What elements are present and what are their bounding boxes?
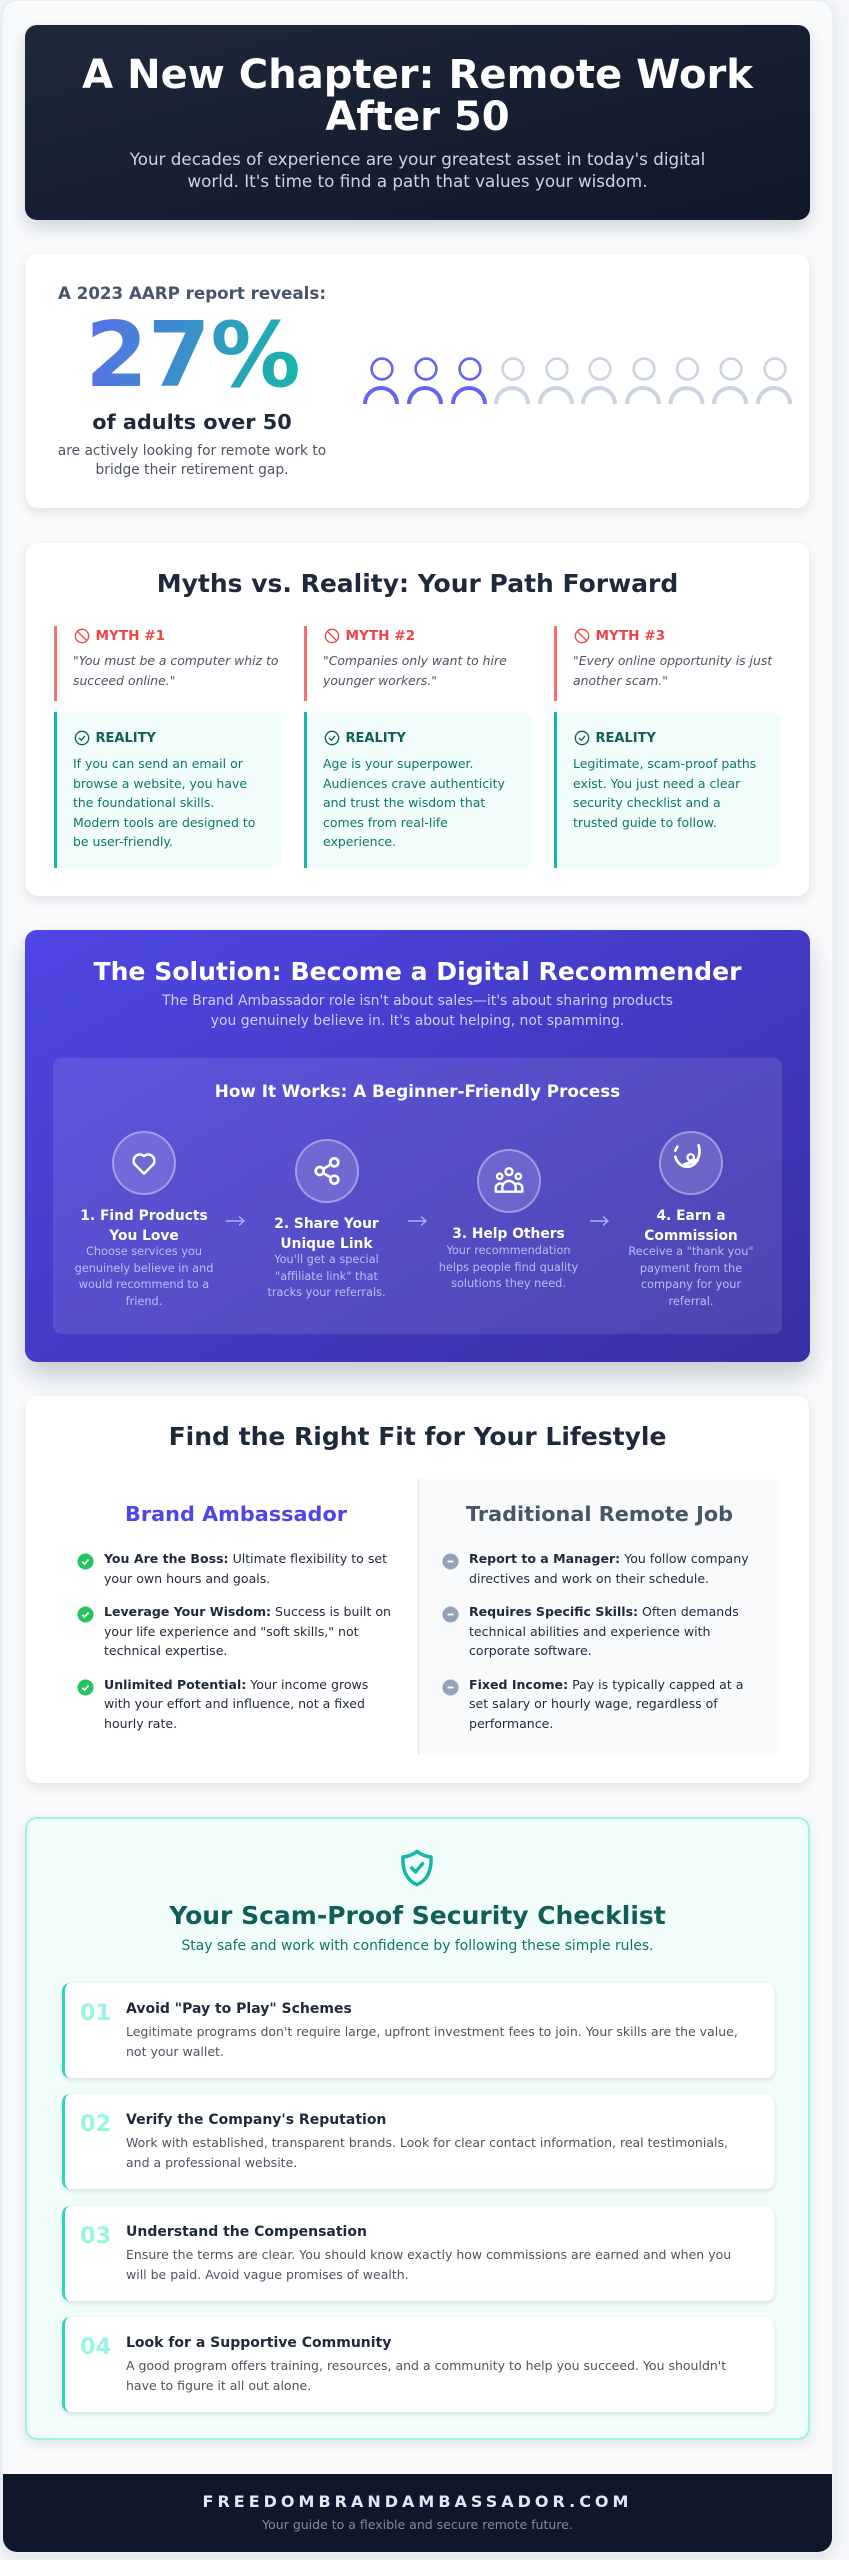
- stat number: 27%: [85, 302, 301, 408]
- item text: [126, 2245, 731, 2284]
- icon: check: [78, 1554, 94, 1570]
- item text: Work with established, transparent brands. Look for clear contact information, real testimonials,: [126, 2135, 728, 2150]
- arrow 1: [226, 1216, 245, 1226]
- step text: friend.: [126, 1295, 162, 1308]
- solution description: [162, 993, 673, 1029]
- myth 1: [54, 626, 282, 701]
- footer: [3, 2474, 832, 2552]
- reality text: browse a website, you have: [73, 776, 247, 790]
- reality 2: [304, 712, 532, 868]
- item text: have to figure it all out alone.: [126, 2378, 311, 2392]
- stat intro: A 2023 AARP report reveals:: [58, 283, 326, 303]
- panel: the solution: [25, 930, 810, 1362]
- panel: statistic: [26, 254, 809, 508]
- myth label: MYTH #3: [596, 628, 665, 644]
- myth quote: "Companies only want to hire: [323, 653, 507, 668]
- checklist item 2: [62, 2094, 774, 2189]
- text: [104, 1551, 387, 1586]
- header banner: [25, 25, 810, 220]
- step title: 2. Share Your: [274, 1216, 379, 1232]
- myth quote: younger workers.": [323, 672, 437, 688]
- stat label: of adults over 50: [92, 410, 292, 434]
- item text: not your wallet.: [126, 2044, 224, 2058]
- reality text: security checklist and a: [573, 795, 721, 810]
- reality text: Legitimate, scam-proof paths: [573, 756, 756, 771]
- icon: ban: [574, 628, 590, 644]
- step text: genuinely believe in and: [75, 1262, 213, 1275]
- icon: check circle: [74, 730, 90, 746]
- reality text: and trust the wisdom that: [323, 795, 485, 810]
- reality text: If you can send an email or: [73, 756, 243, 771]
- text: Unlimited Potential: Your income grows: [104, 1676, 368, 1692]
- icon: people: [476, 1149, 540, 1213]
- text: technical abilities and experience with: [469, 1624, 710, 1638]
- step text: referral.: [668, 1295, 714, 1308]
- subtitle: Your decades of experience are your greatest asset in today's digital: [130, 148, 705, 168]
- panel: myths vs reality: [26, 543, 809, 896]
- stat description: bridge their retirement gap.: [96, 462, 288, 478]
- step text: "affiliate link" that: [275, 1270, 378, 1283]
- step text: Choose services you: [86, 1245, 202, 1258]
- step 3: [439, 1149, 578, 1290]
- item text: Ensure the terms are clear. You should know exactly how commissions are earned and when you: [126, 2247, 731, 2262]
- reality text: [573, 756, 756, 830]
- myth label: MYTH #1: [96, 628, 165, 644]
- panel: security checklist: [25, 1817, 810, 2440]
- myth label: MYTH #2: [346, 628, 415, 644]
- list item: potential: [78, 1676, 368, 1730]
- number: 04: [80, 2334, 111, 2360]
- subtitle: [130, 148, 705, 191]
- number: 01: [80, 2000, 111, 2026]
- text: [469, 1549, 749, 1588]
- icon: minus: [442, 1553, 459, 1570]
- icon: check circle: [324, 730, 340, 746]
- step title: 1. Find Products: [80, 1208, 208, 1224]
- step text: [439, 1244, 578, 1290]
- icon: check: [78, 1680, 94, 1696]
- checklist item 3: [62, 2206, 774, 2301]
- item text: A good program offers training, resources, and a community to help you succeed. You shouldn't: [126, 2358, 726, 2373]
- icon: ban: [324, 628, 340, 644]
- icon: coin: [659, 1131, 723, 1195]
- panel: how it works: [53, 1058, 782, 1334]
- myth 3: [554, 626, 782, 701]
- reality label: REALITY: [346, 730, 406, 746]
- solution heading: The Solution: Become a Digital Recommender: [93, 957, 742, 986]
- arrow 3: [590, 1216, 609, 1226]
- myth quote: [322, 653, 507, 688]
- item title: Understand the Compensation: [126, 2224, 367, 2240]
- step title: Unique Link: [280, 1236, 373, 1252]
- item text: will be paid. Avoid vague promises of wealth.: [126, 2266, 409, 2282]
- list item: boss: [78, 1551, 387, 1586]
- heading: checklist: Your Scam-Proof Security Checklist: [169, 1901, 666, 1930]
- list item: wisdom: [78, 1604, 391, 1658]
- step title: 3. Help Others: [452, 1226, 565, 1242]
- step text: solutions they need.: [451, 1277, 566, 1290]
- step text: company for your: [641, 1278, 741, 1291]
- step 2: [267, 1139, 386, 1299]
- heading: right fit: Find the Right Fit for Your Lifestyle: [169, 1422, 666, 1451]
- text: [469, 1674, 743, 1733]
- reality 3: [554, 712, 780, 868]
- heading: traditional remote job: Traditional Remote Job: [466, 1502, 733, 1526]
- title: A New Chapter: Remote Work: [82, 52, 753, 98]
- step text: [628, 1245, 754, 1308]
- step text: tracks your referrals.: [267, 1286, 386, 1299]
- step text: Receive a "thank you": [628, 1245, 754, 1258]
- text: Report to a Manager: You follow company: [469, 1551, 749, 1566]
- solution description: The Brand Ambassador role isn't about sales—it's about sharing products: [162, 993, 673, 1009]
- item text: Legitimate programs don't require large, upfront investment fees to join. Your skills are the value,: [126, 2024, 738, 2039]
- reality text: Modern tools are designed to: [73, 814, 255, 830]
- list item: skills: [442, 1601, 772, 1661]
- step title: [274, 1216, 379, 1252]
- text: [104, 1604, 391, 1658]
- step text: You'll get a special: [274, 1253, 379, 1266]
- item title: Look for a Supportive Community: [126, 2335, 391, 2351]
- footer brand: FREEDOMBRANDAMBASSADOR.COM: [203, 2492, 632, 2511]
- step text: would recommend to a: [79, 1278, 209, 1291]
- reality label: REALITY: [596, 730, 656, 746]
- text: Leverage Your Wisdom: Success is built on: [104, 1604, 391, 1619]
- text: hourly rate.: [104, 1716, 177, 1730]
- myth quote: [73, 653, 278, 688]
- step 4: [628, 1131, 754, 1308]
- myth quote: another scam.": [573, 672, 668, 688]
- icon: heart: [112, 1131, 176, 1195]
- checklist item 4: [62, 2317, 774, 2412]
- text: You Are the Boss: Ultimate flexibility to set: [104, 1551, 387, 1566]
- icon: check: [78, 1606, 94, 1622]
- arrow 2: [408, 1216, 427, 1226]
- text: [469, 1602, 739, 1660]
- solution description: you genuinely believe in. It's about helping, not spamming.: [211, 1013, 624, 1029]
- reality text: experience.: [323, 834, 396, 849]
- reality label: REALITY: [96, 730, 156, 746]
- title: [82, 52, 754, 140]
- myth 2: [304, 626, 532, 701]
- step 1: [75, 1131, 213, 1308]
- reality text: [323, 756, 505, 849]
- item text: [126, 2022, 738, 2061]
- text: Fixed Income: Pay is typically capped at a: [469, 1676, 743, 1692]
- text: directives and work on their schedule.: [469, 1570, 709, 1586]
- step text: helps people find quality: [439, 1261, 578, 1274]
- item title: Verify the Company's Reputation: [126, 2112, 386, 2128]
- stat description: are actively looking for remote work to: [58, 442, 326, 458]
- step text: payment from the: [640, 1262, 742, 1275]
- reality text: trusted guide to follow.: [573, 814, 717, 830]
- reality text: be user-friendly.: [73, 834, 173, 849]
- reality text: the foundational skills.: [73, 795, 214, 810]
- myth quote: "Every online opportunity is just: [573, 653, 772, 668]
- icon: share: [294, 1139, 358, 1203]
- title: After 50: [325, 94, 510, 140]
- icon: minus: [442, 1606, 459, 1623]
- reality text: comes from real-life: [323, 814, 448, 830]
- icon: ban: [74, 628, 90, 644]
- subtitle: world. It's time to find a path that values your wisdom.: [187, 171, 648, 191]
- text: your life experience and "soft skills," not: [104, 1624, 359, 1638]
- reality text: exist. You just need a clear: [573, 776, 740, 790]
- step title: You Love: [109, 1228, 179, 1244]
- text: technical expertise.: [104, 1643, 227, 1658]
- step title: 4. Earn a: [656, 1208, 726, 1224]
- reality text: Audiences crave authenticity: [323, 776, 505, 790]
- step text: [267, 1253, 386, 1299]
- text: set salary or hourly wage, regardless of: [469, 1696, 718, 1711]
- text: [104, 1676, 368, 1730]
- text: your own hours and goals.: [104, 1570, 270, 1586]
- myth quote: succeed online.": [73, 672, 175, 688]
- reality 1: [54, 712, 282, 868]
- checklist subtitle: Stay safe and work with confidence by following these simple rules.: [181, 1938, 654, 1954]
- list item: manager: [442, 1548, 772, 1590]
- text: corporate software.: [469, 1643, 592, 1658]
- icon: minus: [442, 1678, 459, 1696]
- checklist item 1: [62, 1983, 774, 2078]
- step title: [644, 1208, 738, 1244]
- myth quote: [573, 653, 772, 688]
- item text: [126, 2133, 728, 2172]
- icon: shield: [396, 1847, 438, 1889]
- list item: income: [442, 1674, 772, 1734]
- text: Requires Specific Skills: Often demands: [469, 1604, 739, 1619]
- heading: brand ambassador: Brand Ambassador: [125, 1502, 347, 1526]
- item text: [126, 2356, 726, 2395]
- reality text: Age is your superpower.: [323, 756, 473, 771]
- pictogram: 3 of 10 people: [363, 357, 792, 404]
- text: performance.: [469, 1716, 553, 1730]
- icon: check circle: [574, 730, 590, 746]
- item text: and a professional website.: [126, 2154, 297, 2170]
- footer tagline: Your guide to a flexible and secure remote future.: [262, 2517, 573, 2532]
- text: with your effort and influence, not a fixed: [104, 1696, 365, 1711]
- item title: Avoid "Pay to Play" Schemes: [126, 2001, 352, 2017]
- number: 02: [80, 2111, 111, 2137]
- panel: right fit comparison: [26, 1396, 809, 1783]
- number: 03: [80, 2223, 111, 2249]
- myth quote: "You must be a computer whiz to: [73, 653, 278, 668]
- reality text: [73, 756, 255, 849]
- step title: [80, 1208, 208, 1244]
- step text: Your recommendation: [446, 1244, 571, 1257]
- step text: [75, 1245, 213, 1308]
- heading: how it works: How It Works: A Beginner-Friendly Process: [215, 1081, 620, 1101]
- step title: Commission: [644, 1228, 738, 1244]
- column: traditional remote job background: [418, 1479, 780, 1755]
- stat description: [58, 442, 326, 478]
- heading: myths: Myths vs. Reality: Your Path Forward: [157, 569, 678, 598]
